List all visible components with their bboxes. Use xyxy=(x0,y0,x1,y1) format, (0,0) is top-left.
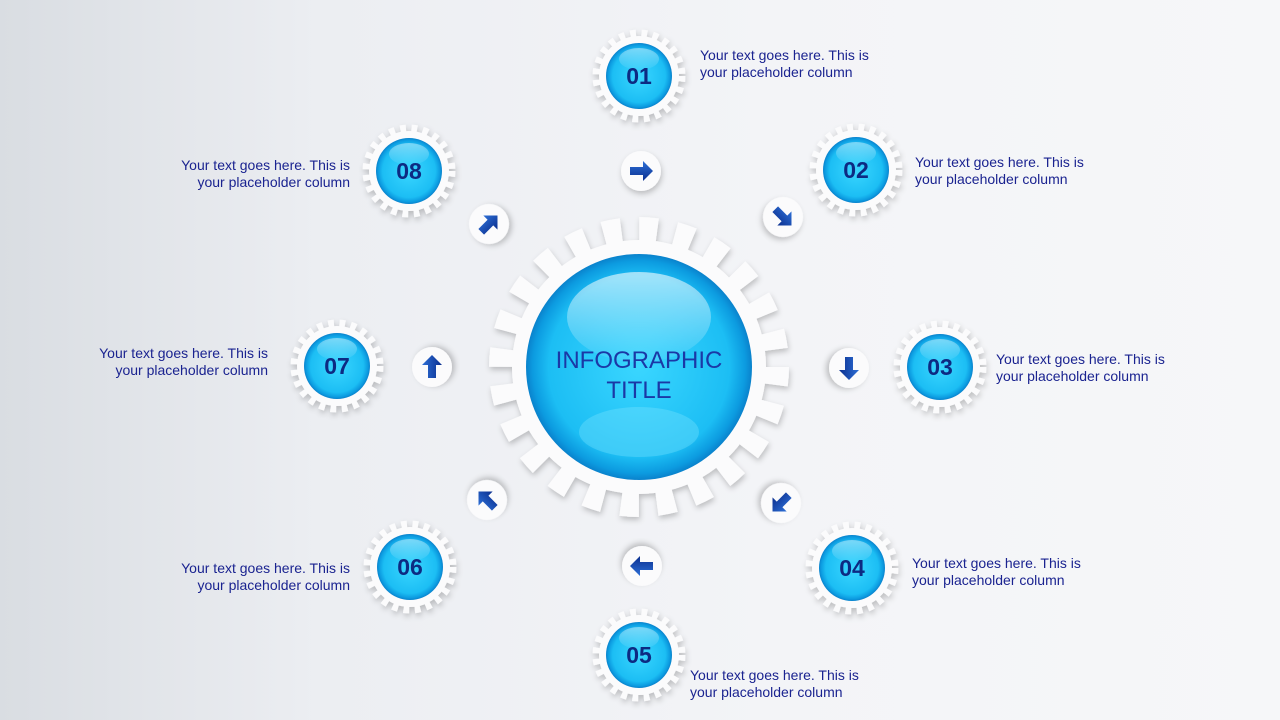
gear 06: 06 xyxy=(397,554,423,580)
gear 08 xyxy=(366,128,452,214)
title: INFOGRAPHIC xyxy=(556,347,722,374)
text 08: your placeholder column xyxy=(197,174,350,190)
text 07: Your text goes here. This is xyxy=(99,345,268,361)
gear 02 xyxy=(814,128,898,212)
arrow down-left xyxy=(753,475,809,531)
arrow up xyxy=(412,347,452,387)
gear 04: 04 xyxy=(839,555,865,581)
text 02 xyxy=(915,154,1084,187)
gear 07: 07 xyxy=(324,353,350,379)
gear 04 xyxy=(810,526,894,610)
text 08: Your text goes here. This is xyxy=(181,157,350,173)
text 07 xyxy=(99,345,268,378)
arrow right xyxy=(621,151,661,191)
gear 08: 08 xyxy=(396,158,422,184)
text 06: Your text goes here. This is xyxy=(181,560,350,576)
gear 05 xyxy=(596,612,682,698)
text 02: Your text goes here. This is xyxy=(915,154,1084,170)
text 03: your placeholder column xyxy=(996,368,1149,384)
text 01: your placeholder column xyxy=(700,64,853,80)
title xyxy=(556,347,722,404)
text 04: Your text goes here. This is xyxy=(912,555,1081,571)
arrow up-left xyxy=(459,472,515,528)
text 07: your placeholder column xyxy=(115,362,268,378)
gear 06 xyxy=(368,524,452,610)
text 05: Your text goes here. This is xyxy=(690,667,859,683)
gear 01: 01 xyxy=(626,63,652,89)
title: TITLE xyxy=(606,377,672,404)
arrow down xyxy=(829,348,869,388)
gear 01 xyxy=(596,34,682,118)
arrow up-right xyxy=(461,196,517,252)
gear 03 xyxy=(898,324,982,410)
text 01: Your text goes here. This is xyxy=(700,47,869,63)
gear 05: 05 xyxy=(626,642,652,668)
text 06 xyxy=(181,560,350,593)
gear 07 xyxy=(294,324,380,408)
text 03 xyxy=(996,351,1165,384)
arrow down-right xyxy=(755,189,811,245)
gear 03: 03 xyxy=(927,354,953,380)
center gear xyxy=(502,230,776,504)
text 03: Your text goes here. This is xyxy=(996,351,1165,367)
text 04: your placeholder column xyxy=(912,572,1065,588)
text 04 xyxy=(912,555,1081,588)
text 01 xyxy=(700,47,869,80)
text 02: your placeholder column xyxy=(915,170,1068,186)
arrow left xyxy=(622,546,662,586)
text 05: your placeholder column xyxy=(690,684,843,700)
gear 02: 02 xyxy=(843,157,869,183)
text 08 xyxy=(181,157,350,190)
text 06: your placeholder column xyxy=(197,576,350,592)
text 05 xyxy=(690,667,859,700)
